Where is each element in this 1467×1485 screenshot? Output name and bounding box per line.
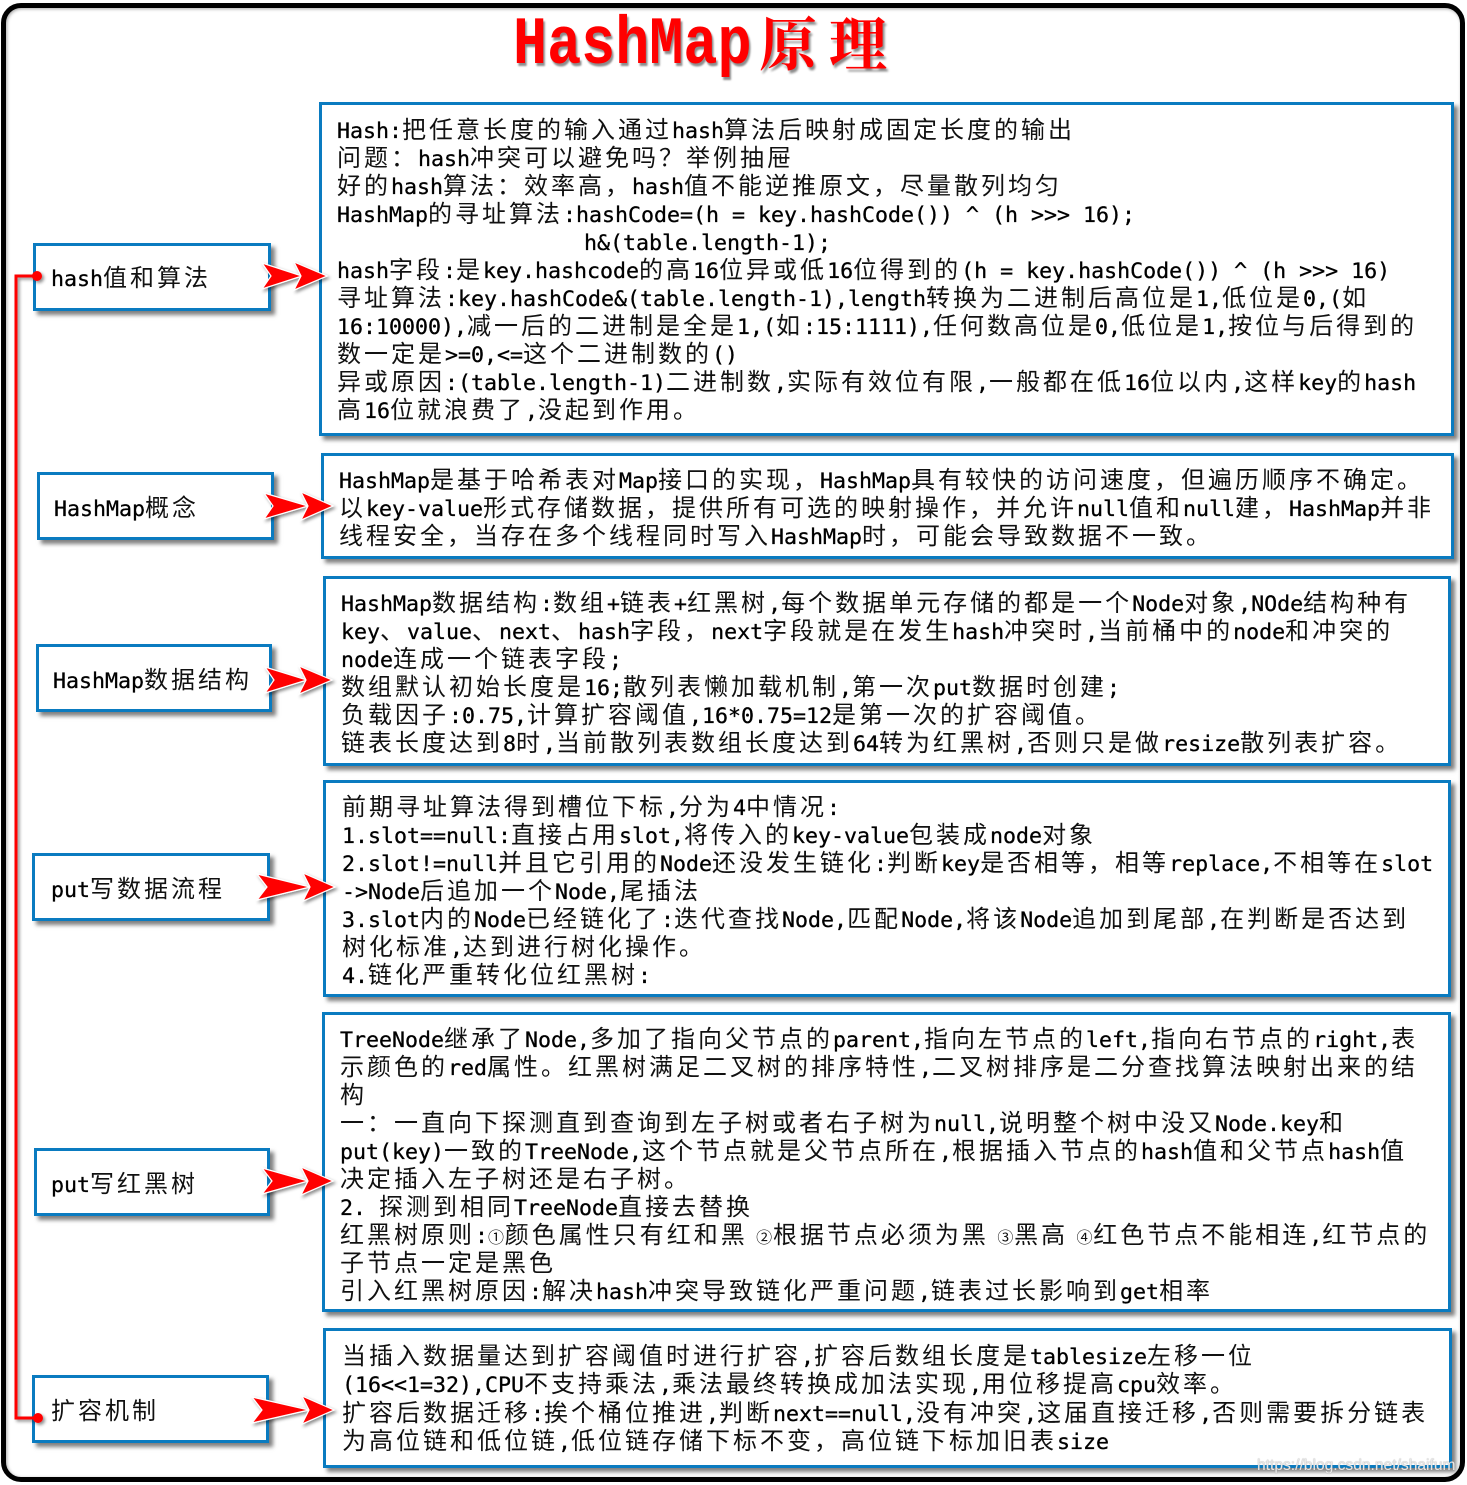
label: put写红黑树: put写红黑树 — [51, 1164, 198, 1199]
text: hash details — [337, 110, 1417, 425]
text: red-black tree details: 一：一直向下探测直到查询到左子树或者右子树为null,说明整个树中没又Node.key和 — [340, 1103, 1346, 1138]
label: 扩容机制 — [32, 1375, 269, 1443]
arrow: data structure — [265, 666, 332, 694]
text: data structure details — [341, 583, 1411, 758]
text: resize details: 为高位链和低位链,低位链存储下标不变，高位链下标加旧表size — [342, 1421, 1109, 1456]
label: hash值和算法: hash值和算法 — [51, 258, 211, 293]
panel: resize mechanism — [323, 1328, 1452, 1468]
arrow: resize — [252, 1396, 334, 1424]
text: red-black tree details: put(key)一致的TreeNode,这个节点就是父节点所在,根据插入节点的hash值和父节点hash值 — [340, 1131, 1407, 1166]
text: put flow details: 3.slot内的Node已经链化了:迭代查找Node,匹配Node,将该Node追加到尾部,在判断是否达到 — [342, 899, 1409, 934]
connector: red bracket linking labels — [16, 271, 43, 1423]
text: put flow details: 树化标准,达到进行树化操作。 — [342, 927, 706, 962]
text: red-black tree details: 构 — [340, 1075, 367, 1110]
text: red-black tree details: 子节点一定是黑色 — [340, 1243, 556, 1278]
arrow: put flow — [257, 873, 335, 901]
text: red-black tree details — [340, 1019, 1430, 1306]
panel: HashMap data structure — [323, 576, 1451, 766]
arrow: red-black tree — [262, 1167, 333, 1195]
panel: put write red-black tree — [322, 1012, 1451, 1312]
text: hash details: hash字段:是key.hashcode的高16位异或低16位得到的(h = key.hashCode()) ^ (h >>> 16) — [337, 250, 1390, 285]
text: put flow details: 2.slot!=null并且它引用的Node还没发生链化:判断key是否相等，相等replace,不相等在slot — [342, 843, 1433, 878]
text: resize details — [342, 1336, 1428, 1456]
text: put flow details: 4.链化严重转化位红黑树: — [342, 955, 651, 990]
label: put写红黑树 — [34, 1148, 270, 1216]
label: HashMap概念: HashMap概念 — [54, 488, 199, 523]
text: concept details — [339, 460, 1434, 551]
text: hash details: 寻址算法:key.hashCode&(table.length-1),length转换为二进制后高位是1,低位是0,(如 — [337, 278, 1369, 313]
text: red-black tree details: 红黑树原则:①颜色属性只有红和黑 ②根据节点必须为黑 ③黑高 ④红色节点不能相连,红节点的 — [340, 1215, 1430, 1250]
arrow: concept — [264, 492, 333, 520]
text: put flow details: 1.slot==null:直接占用slot,将传入的key-value包装成node对象 — [342, 815, 1096, 850]
title — [513, 0, 899, 84]
label: put写数据流程: put写数据流程 — [51, 869, 225, 904]
panel: HashMap concept — [321, 453, 1454, 559]
arrow: hash — [262, 262, 327, 290]
text: data structure details: HashMap数据结构:数组+链表+红黑树,每个数据单元存储的都是一个Node对象,NOde结构种有 — [341, 583, 1411, 618]
text: hash details: HashMap的寻址算法:hashCode=(h = key.hashCode()) ^ (h >>> 16); — [337, 194, 1135, 229]
text: concept details: 线程安全，当存在多个线程同时写入HashMap时，可能会导致数据不一致。 — [339, 516, 1213, 551]
text: put flow details — [342, 787, 1433, 990]
label: HashMap数据结构 — [36, 644, 272, 712]
text: hash details: 高16位就浪费了,没起到作用。 — [337, 390, 700, 425]
text: data structure details: key、value、next、hash字段，next字段就是在发生hash冲突时,当前桶中的node和冲突的 — [341, 611, 1393, 646]
text: red-black tree details: 示颜色的red属性。红黑树满足二叉树的排序特性,二叉树排序是二分查找算法映射出来的结 — [340, 1047, 1418, 1082]
text: put flow details: 前期寻址算法得到槽位下标,分为4中情况: — [342, 787, 840, 822]
label: put写数据流程 — [32, 853, 270, 921]
label: hash值和算法 — [33, 243, 271, 311]
text: hash details: 16:10000),减一后的二进制是全是1,(如:15:1111),任何数高位是0,低位是1,按位与后得到的 — [337, 306, 1417, 341]
text: hash details: 数一定是>=0,<=这个二进制数的() — [337, 334, 738, 369]
label: HashMap数据结构: HashMap数据结构 — [53, 660, 252, 695]
text: concept details: 以key-value形式存储数据，提供所有可选的映射操作，并允许null值和null建，HashMap并非 — [339, 488, 1434, 523]
text: hash details: 问题：hash冲突可以避免吗？举例抽屉 — [337, 138, 794, 173]
text: put flow details: ->Node后追加一个Node,尾插法 — [342, 871, 701, 906]
title: 原理 — [759, 0, 899, 82]
text: red-black tree details: 决定插入左子树还是右子树。 — [340, 1159, 691, 1194]
text: hash details: 好的hash算法：效率高，hash值不能逆推原文，尽量散列均匀 — [337, 166, 1062, 201]
label: 扩容机制: 扩容机制 — [51, 1391, 159, 1426]
text: hash details: h&(table.length-1); — [584, 231, 831, 256]
watermark: https://blog.csdn.net/shaifum — [1257, 1457, 1456, 1474]
text: data structure details: 链表长度达到8时,当前散列表数组长度达到64转为红黑树,否则只是做resize散列表扩容。 — [341, 723, 1402, 758]
text: red-black tree details: TreeNode继承了Node,多加了指向父节点的parent,指向左节点的left,指向右节点的right,表 — [340, 1019, 1418, 1054]
text: concept details: HashMap是基于哈希表对Map接口的实现，HashMap具有较快的访问速度，但遍历顺序不确定。 — [339, 460, 1424, 495]
text: red-black tree details: 2. 探测到相同TreeNode直接去替换 — [340, 1187, 753, 1222]
text: resize details: (16<<1=32),CPU不支持乘法,乘法最终转换成加法实现,用位移提高cpu效率。 — [342, 1364, 1237, 1399]
text: data structure details: 负载因子:0.75,计算扩容阈值,16*0.75=12是第一次的扩容阈值。 — [341, 695, 1102, 730]
text: red-black tree details: 引入红黑树原因:解决hash冲突导致链化严重问题,链表过长影响到get相率 — [340, 1271, 1213, 1306]
text: hash details: Hash:把任意长度的输入通过hash算法后映射成固定长度的输出 — [337, 110, 1075, 145]
text: resize details: 当插入数据量达到扩容阈值时进行扩容,扩容后数组长度是tablesize左移一位 — [342, 1336, 1255, 1371]
label: HashMap概念 — [37, 472, 274, 540]
text: resize details: 扩容后数据迁移:挨个桶位推进,判断next==null,没有冲突,这届直接迁移,否则需要拆分链表 — [342, 1393, 1428, 1428]
title: HashMap — [513, 7, 752, 84]
panel: put write flow — [323, 780, 1451, 997]
panel: hash value and algorithm — [319, 102, 1454, 436]
text: data structure details: 数组默认初始长度是16;散列表懒加载机制,第一次put数据时创建; — [341, 667, 1120, 702]
text: hash details: 异或原因:(table.length-1)二进制数,实际有效位有限,一般都在低16位以内,这样key的hash — [337, 362, 1416, 397]
text: data structure details: node连成一个链表字段; — [341, 639, 622, 674]
